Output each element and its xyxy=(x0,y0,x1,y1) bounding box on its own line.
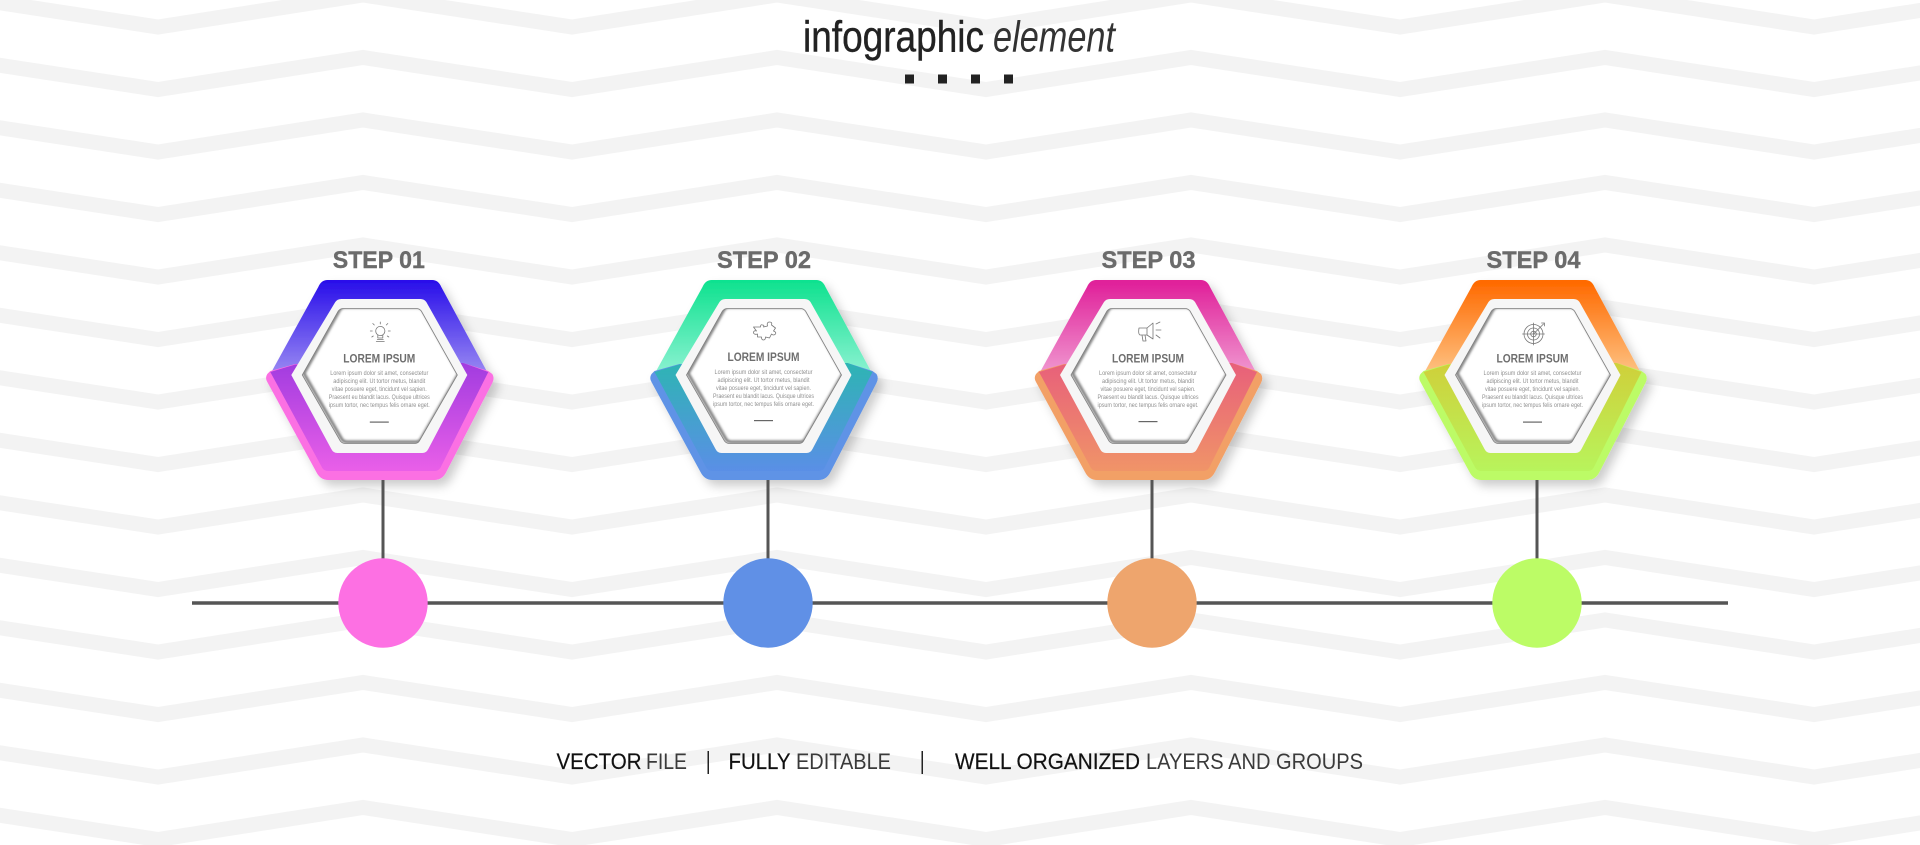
footer text: FULLY xyxy=(728,749,791,774)
node: step 01 xyxy=(338,558,428,648)
text: lorem ipsum: adipiscing elit. Ut tortor metus, blandit xyxy=(1102,378,1194,385)
text: lorem ipsum: vitae posuere eget, tincidunt vel sapien. xyxy=(332,386,427,393)
footer text: VECTOR xyxy=(556,749,642,774)
text: lorem ipsum: ipsum tortor, nec tempus felis ornare eget. xyxy=(329,402,430,409)
footer text: LAYERS AND GROUPS xyxy=(1146,749,1363,774)
text: lorem ipsum: Lorem ipsum dolor sit amet, consectetur xyxy=(1484,370,1582,377)
title: element xyxy=(993,12,1116,62)
hexagon frame xyxy=(1035,280,1262,480)
heading: step 02: STEP 02 xyxy=(717,247,811,274)
text: lorem ipsum: LOREM IPSUM xyxy=(343,352,415,366)
footer text: FILE xyxy=(646,749,687,774)
text: lorem ipsum: Lorem ipsum dolor sit amet, consectetur xyxy=(330,370,429,377)
text: lorem ipsum: Lorem ipsum dolor sit amet, consectetur xyxy=(714,369,813,376)
text: lorem ipsum xyxy=(713,350,815,421)
panel: step 02 xyxy=(650,247,878,480)
node: step 02 xyxy=(723,558,813,648)
panel: step 04 xyxy=(1419,247,1647,480)
text: lorem ipsum: adipiscing elit. Ut tortor metus, blandit xyxy=(1486,378,1579,385)
panel: step 01 xyxy=(266,247,494,480)
heading: step 03: STEP 03 xyxy=(1102,247,1196,274)
title dots xyxy=(905,74,1013,84)
text: lorem ipsum: adipiscing elit. Ut tortor metus, blandit xyxy=(333,378,425,385)
text: lorem ipsum: Praesent eu blandit lacus. Quisque ultrices xyxy=(1482,394,1584,401)
footer text: WELL ORGANIZED xyxy=(955,749,1140,774)
text: lorem ipsum: LOREM IPSUM xyxy=(1112,352,1184,366)
text: lorem ipsum: Praesent eu blandit lacus. Quisque ultrices xyxy=(713,393,815,400)
text: lorem ipsum: LOREM IPSUM xyxy=(1496,352,1568,366)
text: lorem ipsum: ipsum tortor, nec tempus felis ornare eget. xyxy=(1098,402,1199,409)
hexagon frame xyxy=(650,280,878,480)
connector: step 03 xyxy=(1150,480,1154,560)
node: step 03 xyxy=(1107,558,1197,648)
text: lorem ipsum xyxy=(1482,352,1584,423)
hexagon frame xyxy=(266,280,494,480)
panel: step 03 xyxy=(1035,247,1262,480)
text: lorem ipsum: vitae posuere eget, tincidunt vel sapien. xyxy=(1485,386,1580,393)
text: lorem ipsum: Praesent eu blandit lacus. Quisque ultrices xyxy=(329,394,430,401)
connector: step 01 xyxy=(382,480,384,560)
node: step 04 xyxy=(1492,558,1582,648)
text: lorem ipsum xyxy=(1098,352,1199,422)
icon: megaphone xyxy=(1139,322,1161,341)
text: lorem ipsum: adipiscing elit. Ut tortor metus, blandit xyxy=(718,377,810,384)
text: lorem ipsum: ipsum tortor, nec tempus felis ornare eget. xyxy=(713,401,814,408)
icon: target xyxy=(1522,323,1544,345)
connector: step 02 xyxy=(766,480,770,560)
footer text xyxy=(556,749,1363,774)
text: lorem ipsum: LOREM IPSUM xyxy=(728,350,800,364)
connector: step 04 xyxy=(1536,480,1538,560)
title xyxy=(803,12,1116,62)
text: lorem ipsum: Lorem ipsum dolor sit amet, consectetur xyxy=(1099,370,1198,377)
timeline axis xyxy=(192,601,1728,605)
text: lorem ipsum: vitae posuere eget, tincidunt vel sapien. xyxy=(716,385,811,392)
text: lorem ipsum: ipsum tortor, nec tempus felis ornare eget. xyxy=(1482,402,1583,409)
icon: puzzle xyxy=(754,322,776,340)
hexagon frame xyxy=(1419,280,1647,480)
icon: light bulb xyxy=(370,322,390,342)
heading: step 01: STEP 01 xyxy=(333,247,425,274)
footer text: EDITABLE xyxy=(796,749,891,774)
text: lorem ipsum xyxy=(329,352,430,423)
text: lorem ipsum: vitae posuere eget, tincidunt vel sapien. xyxy=(1100,386,1196,393)
text: lorem ipsum: Praesent eu blandit lacus. Quisque ultrices xyxy=(1098,394,1199,401)
heading: step 04: STEP 04 xyxy=(1486,247,1581,274)
title: infographic xyxy=(803,12,984,62)
